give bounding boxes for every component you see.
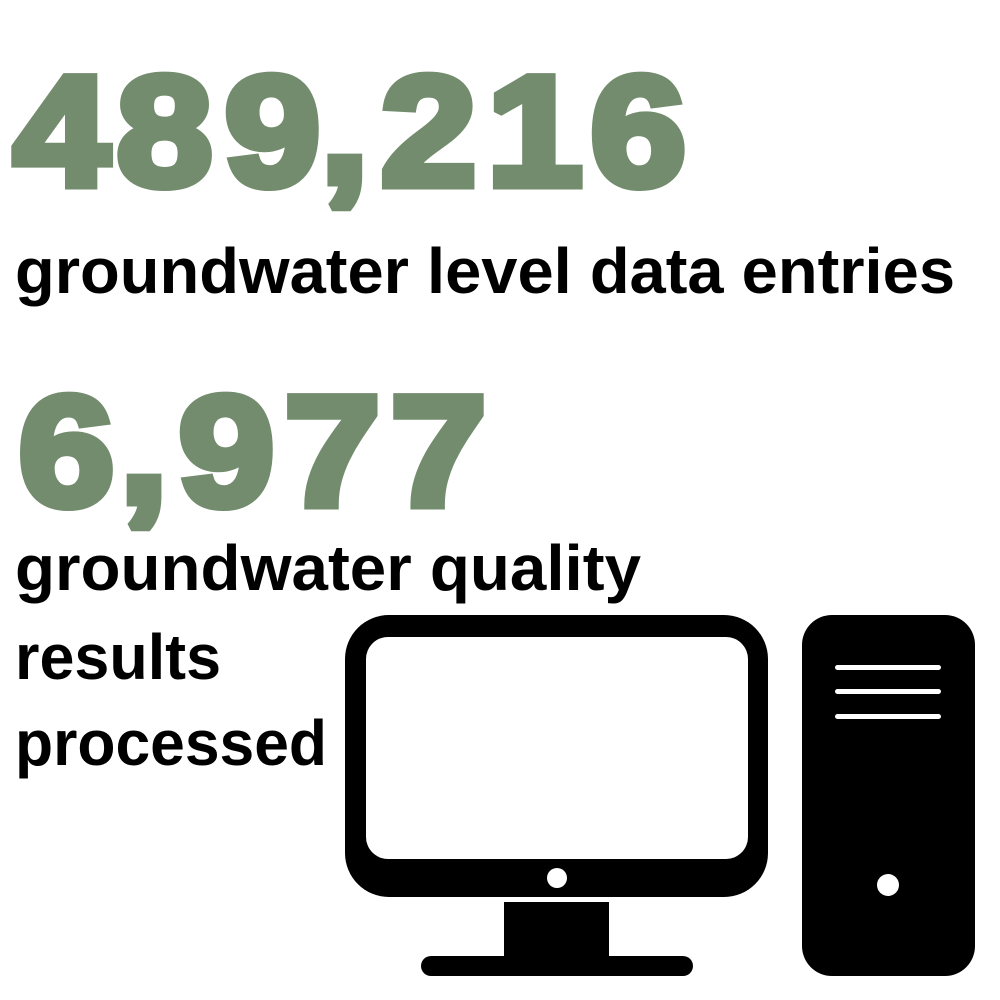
icon: tower case [802,615,975,976]
statistic: 6,977: , [119,357,168,536]
statistic: 6,977: 977 [179,364,486,538]
statistic: 6,977 [19,357,486,538]
label: groundwater quality results processed [15,532,641,779]
icon: monitor [345,615,768,976]
label: groundwater quality results processed: processed [15,707,327,779]
statistic: 489,216: 489 [14,44,320,218]
label: groundwater quality results processed: groundwater quality [15,532,641,604]
icon: desktop computer [345,615,975,976]
statistic: 6,977: 6 [19,364,114,538]
label: groundwater quality results processed: results [15,621,221,693]
statistic: 489,216: , [320,37,369,216]
statistic: 489,216 [14,37,686,218]
statistic: 489,216: 216 [381,44,686,218]
label: groundwater level data entries: groundwater level data entries [15,235,955,307]
